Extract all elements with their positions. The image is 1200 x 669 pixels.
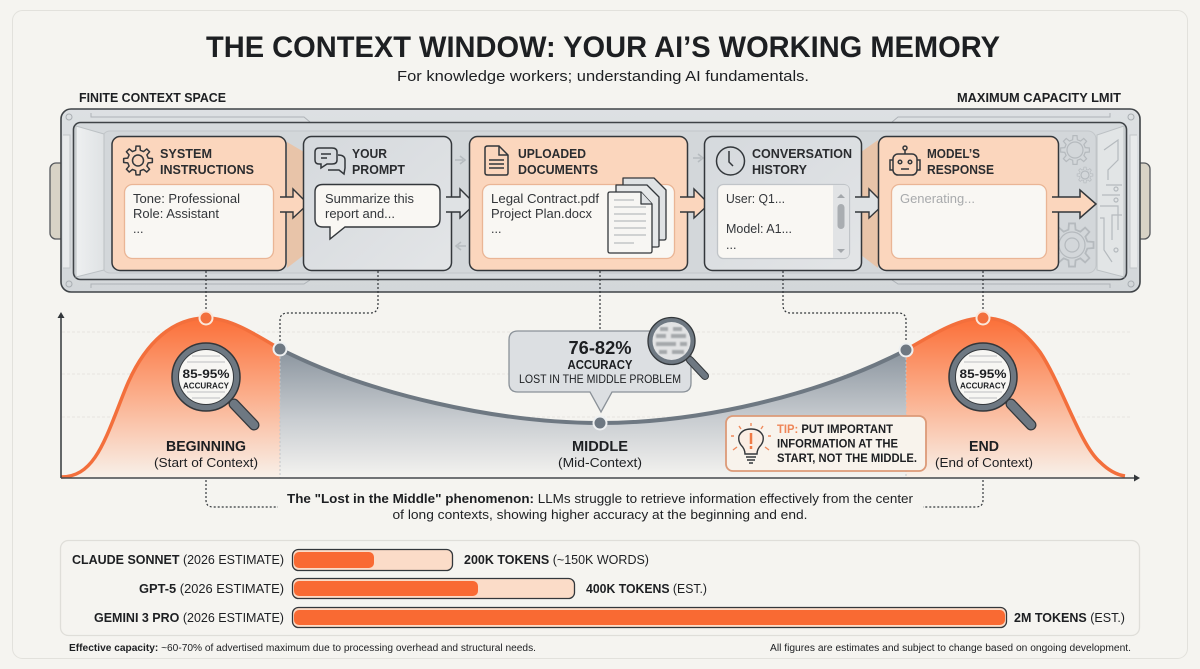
label: end: (End of Context) [935,455,1033,470]
bar: gpt-5: 400K TOKENS (EST.) [586,582,707,596]
icon: gear [124,146,152,175]
card: uploaded documents: DOCUMENTS [518,163,598,177]
text: lost in the middle explanation: of long contexts, showing higher accuracy at the beginning and end. [392,507,808,522]
label: middle [558,439,642,470]
arrow [280,189,308,218]
arrow [446,189,475,218]
tinted connection wedges [287,142,304,268]
icon: document [485,146,508,175]
text: lost in the middle explanation [287,491,914,522]
heading: CONVERSATION [752,147,852,161]
card: system instructions: INSTRUCTIONS [160,163,254,177]
area: end [906,318,1125,478]
subtitle: For knowledge workers; understanding AI fundamentals. [397,68,809,85]
area: middle [280,349,906,478]
text box [892,184,1046,258]
panel: context window frame [50,109,1150,292]
title: THE CONTEXT WINDOW: YOUR AI’S WORKING MEMORY [206,31,1000,64]
decorative ghost arrows [455,154,703,250]
data points [200,312,212,324]
magnifier: end 85-95% [949,343,1031,425]
bar: gemini 3 pro: GEMINI 3 PRO (2026 ESTIMATE) [94,611,284,625]
speech bubble [315,184,440,239]
bar: gemini 3 pro [94,608,1125,628]
icon: stacked pages [608,178,666,253]
magnifier: beginning 85-95%: ACCURACY [183,380,229,390]
callout: 76-82% accuracy [509,318,705,412]
icon: robot [890,146,920,175]
label: end [935,439,1033,470]
card: your prompt: PROMPT [352,163,405,177]
label: beginning: (Start of Context) [154,455,258,470]
icon: clock [716,147,744,175]
label: finite context space: FINITE CONTEXT SPACE [79,91,226,105]
label: middle: (Mid-Context) [558,455,642,470]
card: model's response: RESPONSE [927,163,994,177]
card: uploaded documents: Project Plan.docx [491,207,593,221]
card: conversation history: User: Q1... [726,192,785,206]
callout: tip: INFORMATION AT THE [777,436,898,450]
card: uploaded documents [470,136,688,270]
card: conversation history [704,136,862,270]
card: uploaded documents: Legal Contract.pdf [491,192,600,206]
bar: gemini 3 pro: 2M TOKENS (EST.) [1014,611,1125,625]
label: beginning: BEGINNING [166,439,246,455]
callout: 76-82% accuracy: LOST IN THE MIDDLE PROBLEM [519,372,681,386]
bar: gpt-5 [139,578,707,598]
label: beginning [154,439,258,470]
dotted connectors [206,271,983,507]
icon: light bulb [731,423,771,463]
card: model's response: Generating... [900,192,975,206]
label: maximum capacity limit: MAXIMUM CAPACITY LMIT [957,91,1121,105]
label: middle: MIDDLE [572,439,628,455]
card: your prompt [304,136,452,270]
heading: MODEL’S [927,147,980,161]
text: lost in the middle explanation: The "Lost in the Middle" phenomenon: LLMs struggle to retrieve information effectively from the center [287,491,914,506]
bar: claude sonnet [72,550,649,570]
magnifier: end 85-95%: 85-95% [960,367,1007,381]
callout: tip: START, NOT THE MIDDLE. [777,451,917,465]
bar: gpt-5: GPT-5 (2026 ESTIMATE) [139,582,284,596]
text box with scrollbar [718,184,850,258]
card: system instructions: ... [133,222,143,236]
label: end: END [969,439,999,455]
card: your prompt: Summarize this [325,192,414,206]
gridlines [62,332,1130,417]
footnote: effective capacity: Effective capacity: ~60-70% of advertised maximum due to processing overhead and structural needs. [69,643,536,654]
curve lines [61,318,280,477]
card: system instructions [112,136,286,270]
callout: 76-82% accuracy: ACCURACY [568,357,633,372]
decorative gears and circuits [1050,136,1122,267]
magnifier: beginning 85-95% [172,343,254,425]
panel: model capacity bars [60,540,1140,636]
text box [482,184,674,258]
area: beginning [61,318,280,478]
card: uploaded documents: ... [491,222,501,236]
magnifier: blurred text [648,318,705,376]
text box [124,184,274,258]
card: your prompt: report and... [325,207,395,221]
callout: tip [726,416,926,471]
heading: UPLOADED [518,147,586,161]
arrow: output [1052,190,1096,218]
magnifier: end 85-95%: ACCURACY [960,380,1006,390]
card: model's response [878,136,1058,270]
card: conversation history: Model: A1... [726,222,792,236]
axes [60,316,62,478]
callout: tip: TIP: PUT IMPORTANT [777,422,894,436]
callout: 76-82% accuracy: 76-82% [568,337,632,358]
card: conversation history: ... [726,238,736,252]
bar: claude sonnet: CLAUDE SONNET (2026 ESTIMATE) [72,553,284,567]
card: system instructions: Tone: Professional [133,192,240,206]
heading: YOUR [352,147,387,161]
card: system instructions: Role: Assistant [133,207,220,221]
card: conversation history: HISTORY [752,163,808,177]
heading: SYSTEM [160,147,212,161]
arrow [680,189,709,218]
arrow [855,189,884,218]
chart: accuracy curve [58,312,1140,482]
magnifier: beginning 85-95%: 85-95% [182,367,230,381]
bar: claude sonnet: 200K TOKENS (~150K WORDS) [464,553,649,567]
footnote: estimates: All figures are estimates and subject to change based on ongoing development. [770,643,1131,654]
icon: chat bubbles [315,148,345,174]
